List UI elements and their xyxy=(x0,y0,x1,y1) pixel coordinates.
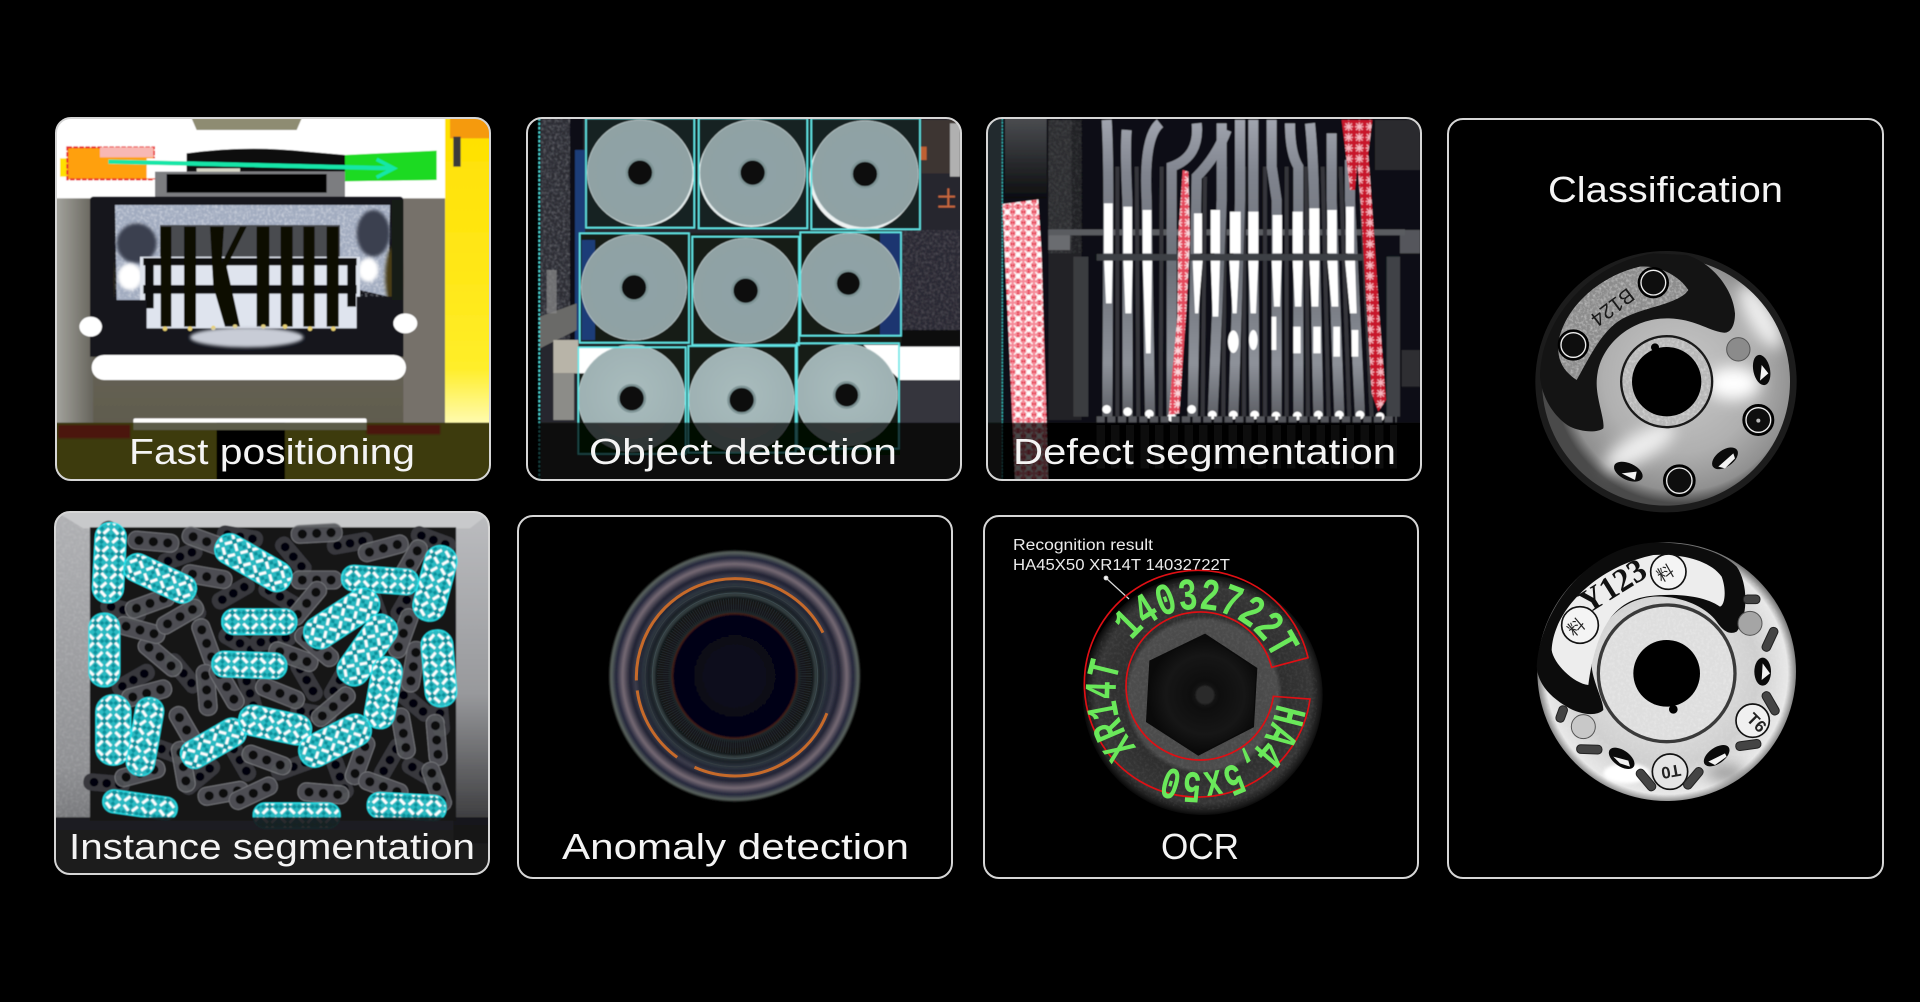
panel: anomaly detection xyxy=(518,516,952,878)
panel: defect segmentation xyxy=(983,117,1423,483)
engraved characters xyxy=(1086,579,1306,802)
heading: Defect segmentation xyxy=(1013,431,1396,472)
heading: Object detection xyxy=(589,431,897,472)
defect mask: middle strip xyxy=(1169,170,1190,415)
recognition result text: Recognition result xyxy=(1013,537,1154,554)
panel: fast positioning xyxy=(53,117,493,483)
chain parts xyxy=(113,523,454,814)
pad dots xyxy=(1102,405,1384,422)
stamped circles: 料 xyxy=(1654,561,1678,586)
panel: classification xyxy=(1448,119,1883,878)
bright reflections xyxy=(1104,203,1358,357)
engraved characters: 14032722T xyxy=(1115,579,1300,654)
secondary leads xyxy=(1117,167,1372,417)
image: metal leads with red defect masks xyxy=(983,117,1423,483)
panel: OCR xyxy=(983,515,1419,879)
image: part B124 xyxy=(1535,251,1797,512)
stamped circles: 料 xyxy=(1564,615,1589,640)
arrow xyxy=(108,159,394,177)
part screws and holes xyxy=(1559,268,1773,496)
image: engraved bolt head xyxy=(1083,570,1322,815)
defect mask: right strip xyxy=(1342,120,1386,412)
recognition result text xyxy=(1013,537,1231,574)
image: connector with positioning arrow xyxy=(53,117,493,483)
center bore xyxy=(1620,335,1713,428)
positioning template box xyxy=(60,147,155,179)
defect mask: left strip xyxy=(1002,199,1048,480)
instance masks xyxy=(89,522,460,828)
part marking: Y123 xyxy=(1573,552,1653,621)
target box xyxy=(345,151,437,181)
heading: Instance segmentation xyxy=(69,826,475,867)
pins xyxy=(161,227,339,327)
panel: object detection xyxy=(523,117,963,483)
stamped circles: T0 xyxy=(1660,760,1682,782)
leads xyxy=(1107,120,1360,417)
rolls xyxy=(578,120,918,453)
engraved characters: XR14T xyxy=(1086,658,1136,764)
slots xyxy=(1555,595,1781,792)
image: part Y123 xyxy=(1537,542,1796,801)
roll holes xyxy=(618,159,878,413)
stamped circles: T6 xyxy=(1743,709,1770,736)
engraved characters: HA4,5x50 xyxy=(1162,705,1306,802)
stamped circles xyxy=(1562,554,1770,789)
heading: OCR xyxy=(1161,826,1239,867)
leader line xyxy=(1104,576,1129,599)
center bore xyxy=(1597,603,1737,743)
detection boxes xyxy=(578,118,920,454)
red inspection region xyxy=(1084,570,1310,797)
chain parts: back layer xyxy=(83,518,458,802)
image: paper rolls with detection boxes xyxy=(523,117,963,483)
image: concentric glass rings xyxy=(609,550,861,802)
recognition result text: HA45X50 XR14T 14032722T xyxy=(1013,557,1231,574)
heading: Anomaly detection xyxy=(562,826,909,867)
panel: instance segmentation xyxy=(53,510,493,881)
image: bin of parts with teal instance masks xyxy=(53,510,493,881)
heading: Classification xyxy=(1548,169,1783,210)
part marking: B124 xyxy=(1586,283,1638,331)
orange reflection ring xyxy=(636,579,834,776)
heading: Fast positioning xyxy=(129,431,415,472)
